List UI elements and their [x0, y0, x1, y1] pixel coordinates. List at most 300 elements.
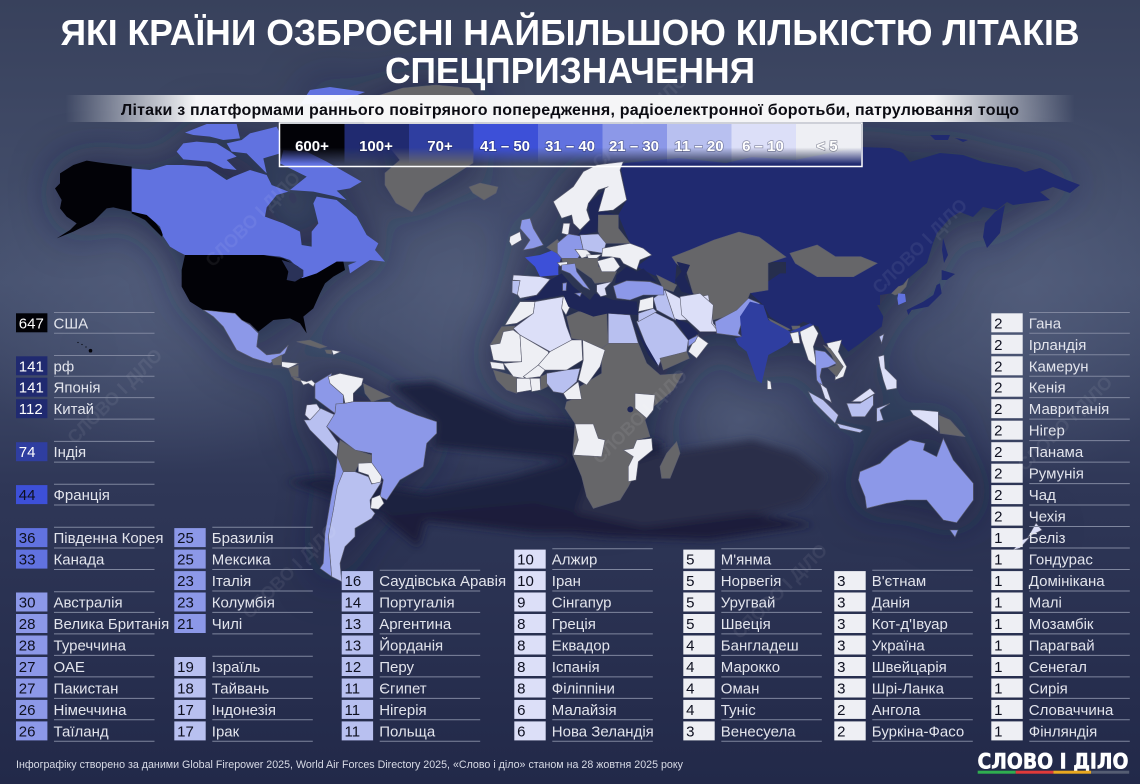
row: Туреччина: Туреччина	[54, 638, 127, 654]
Uruguay	[371, 495, 384, 509]
row: Мозамбік: Мозамбік	[1029, 616, 1094, 633]
row: Німеччина	[16, 700, 154, 720]
Benelux	[547, 239, 560, 253]
row: Венесуела: Венесуела	[721, 723, 796, 740]
legend labels	[295, 138, 838, 155]
row: Чад	[991, 485, 1130, 505]
Tasmania	[950, 530, 958, 537]
row: Марокко	[683, 657, 822, 677]
Malaysia	[820, 383, 832, 403]
row: Кенія	[991, 378, 1130, 398]
Togo and Benin	[541, 373, 548, 390]
Russia	[625, 135, 1080, 305]
row: Саудівська Аравія: 16	[345, 573, 361, 590]
South Korea	[897, 293, 906, 305]
row: Таїланд	[16, 721, 154, 741]
Morocco	[505, 302, 535, 325]
ranking column 4	[514, 549, 654, 741]
Red Sea and Persian Gulf	[627, 317, 698, 412]
row: Іспанія: 8	[517, 659, 525, 676]
world map	[55, 85, 1080, 582]
row: Південна Корея: Південна Корея	[54, 530, 163, 547]
West Africa	[493, 370, 517, 393]
row: Туреччина	[16, 636, 154, 655]
Mozambique	[623, 438, 653, 482]
row: Південна Корея: 36	[19, 530, 35, 547]
Iraq	[653, 290, 675, 320]
row: Індонезія: Індонезія	[212, 702, 276, 719]
row: Саудівська Аравія: Саудівська Аравія	[379, 573, 506, 590]
legend labels: 600+	[295, 138, 329, 155]
Slovakia	[587, 254, 602, 258]
row: Нігер: Нігер	[1029, 423, 1065, 440]
South and East Asia, Oceania	[680, 293, 973, 523]
row: Парагвай: Парагвай	[1029, 638, 1095, 654]
row: Аргентина	[342, 614, 480, 634]
row: Беліз	[991, 528, 1130, 548]
row: Беліз: 1	[994, 530, 1002, 547]
Ecuador	[305, 404, 321, 420]
row: Ізраїль: Ізраїль	[212, 659, 260, 676]
Kazakhstan and Central Asia	[672, 232, 786, 320]
row: Румунія: 2	[994, 466, 1002, 483]
row: Малі: Малі	[1029, 594, 1062, 612]
row: Швейцарія: Швейцарія	[872, 659, 947, 676]
Western Sahara	[490, 326, 515, 345]
row: Уругвай: Уругвай	[721, 594, 775, 612]
subtitle bar	[65, 95, 1075, 122]
row: Тайвань	[174, 678, 313, 698]
row: Ангола: Ангола	[872, 702, 921, 719]
row: Словаччина	[991, 700, 1130, 720]
row: Індія: 74	[19, 444, 35, 461]
Greenland	[364, 85, 476, 212]
row: Еквадор: 8	[517, 638, 525, 654]
row: Польща: Польща	[379, 723, 436, 740]
row: Туніс: 4	[686, 702, 694, 719]
Paraguay	[358, 463, 382, 485]
row: Сінгапур: 9	[517, 594, 525, 612]
Colombia	[315, 373, 343, 413]
row: Пакистан: Пакистан	[54, 680, 118, 698]
row: Норвегія: 5	[686, 573, 694, 590]
Canadian Arctic islands	[177, 124, 362, 200]
Denmark	[562, 223, 570, 235]
row: В'єтнам: 3	[837, 573, 845, 590]
Scandinavia and Finland	[553, 162, 627, 230]
Oman	[688, 335, 708, 358]
row: Чилі: Чилі	[212, 616, 242, 633]
row: Колумбія: Колумбія	[212, 594, 275, 612]
row: Алжир: 10	[517, 552, 534, 569]
row: Оман: Оман	[721, 680, 759, 698]
Laos and Cambodia	[823, 345, 843, 377]
row: Марокко: Марокко	[721, 659, 780, 676]
Saudi Arabia	[637, 312, 688, 367]
row: Чехія: Чехія	[1029, 509, 1066, 526]
row: Нова Зеландія: 6	[517, 723, 525, 740]
UAE	[688, 335, 698, 347]
source note: Інфографіку створено за даними Global Firepower 2025, World Air Forces Directory 2025, «Слово і діло» станом на 28 жовтня 2025 року	[16, 759, 684, 771]
USA	[182, 255, 345, 333]
France	[525, 251, 562, 277]
row: Кенія: 2	[994, 380, 1002, 397]
Pakistan	[715, 298, 760, 337]
row: Малі	[991, 592, 1130, 612]
row: Німеччина: Німеччина	[54, 702, 127, 719]
legend labels: 41 – 50	[480, 138, 530, 155]
row: Туніс: Туніс	[721, 702, 756, 719]
row: Україна: 3	[837, 638, 845, 654]
row: Шрі-Ланка: 3	[837, 680, 845, 698]
Taiwan	[879, 334, 884, 343]
Western New Guinea	[910, 410, 938, 432]
row: Ангола: 2	[837, 702, 845, 719]
row: Китай	[16, 399, 154, 419]
aircraft silhouette	[287, 382, 825, 547]
row: Буркіна-Фасо: 2	[837, 723, 845, 740]
title: ЯКІ КРАЇНИ ОЗБРОЄНІ НАЙБІЛЬШОЮ КІЛЬКІСТЮ ЛІТАКІВ	[60, 11, 1080, 53]
Egypt	[608, 313, 638, 343]
row: Пакистан: 27	[19, 680, 35, 698]
legend labels: < 5	[816, 138, 838, 155]
ranking column 7	[991, 312, 1130, 741]
row: Буркіна-Фасо	[834, 721, 973, 741]
Central America	[272, 355, 302, 382]
row: Японія: Японія	[54, 380, 101, 397]
legend labels: 100+	[359, 138, 393, 155]
row: Мозамбік: 1	[994, 616, 1002, 633]
row: Марокко: 4	[686, 659, 694, 676]
row: Польща: 11	[345, 723, 360, 740]
row: Йорданія: Йорданія	[379, 636, 443, 654]
row: Фінляндія: 1	[994, 723, 1002, 740]
row: Фінляндія: Фінляндія	[1029, 723, 1097, 740]
row: Японія	[16, 378, 154, 398]
row: Японія: 141	[19, 380, 44, 397]
Caspian Sea	[675, 262, 693, 295]
North Korea	[892, 278, 908, 295]
row: Норвегія: Норвегія	[721, 573, 781, 590]
Baltics and Belarus	[598, 215, 630, 243]
row: Єгипет	[342, 678, 480, 698]
Brazil	[327, 402, 437, 500]
row: Сінгапур: Сінгапур	[552, 594, 612, 612]
row: Португалія	[342, 592, 480, 612]
legend labels: 21 – 30	[609, 138, 659, 155]
Caribbean	[297, 340, 341, 355]
row: Сенегал: 1	[994, 659, 1002, 676]
row: Домінікана: Домінікана	[1029, 573, 1105, 590]
row: Португалія: 14	[345, 594, 361, 612]
Nigeria	[547, 368, 580, 393]
Burkina Faso	[523, 365, 545, 378]
Bolivia	[337, 440, 372, 472]
Ivory Coast	[517, 378, 532, 393]
Canada	[132, 165, 385, 278]
row: Гондурас: 1	[994, 552, 1002, 569]
watermarks: СЛОВО І ДІЛО	[202, 168, 304, 271]
row: Словаччина: Словаччина	[1029, 702, 1114, 719]
row: Нігер: 2	[994, 423, 1002, 440]
row: Мексика: Мексика	[212, 552, 271, 569]
watermarks: СЛОВО І ДІЛО	[589, 70, 691, 173]
row: Ізраїль	[174, 656, 313, 677]
Madagascar	[660, 442, 680, 478]
row: Фінляндія	[991, 721, 1130, 741]
Cameroon	[563, 382, 582, 399]
row: Індонезія	[174, 700, 313, 720]
ranking column 6	[834, 570, 973, 741]
legend labels: 70+	[427, 138, 453, 155]
row: Сирія	[991, 678, 1130, 698]
row: Велика Британія: 28	[19, 616, 35, 633]
Libya	[567, 312, 608, 348]
Turkey	[613, 281, 664, 300]
China	[751, 273, 883, 352]
Peru	[304, 408, 338, 457]
row: Колумбія	[174, 592, 313, 612]
Argentina	[328, 472, 382, 582]
row: М'янма	[683, 549, 822, 570]
row: Україна	[834, 636, 973, 655]
watermarks	[64, 70, 1116, 643]
row: Канада: Канада	[54, 552, 105, 569]
United Kingdom	[520, 218, 543, 250]
Europe	[509, 162, 693, 317]
row: Сінгапур	[514, 592, 653, 612]
row: Перу: Перу	[379, 659, 414, 676]
row: Алжир	[514, 549, 653, 570]
Mauritania	[490, 330, 522, 362]
row: Румунія: Румунія	[1029, 466, 1084, 483]
row: Бразилія	[174, 527, 313, 548]
South America and Africa	[300, 290, 720, 582]
row: Україна: Україна	[872, 638, 925, 654]
row: Філіппіни	[514, 678, 653, 698]
row: Венесуела	[683, 721, 822, 741]
row: Іран: 10	[517, 573, 534, 590]
row: Тайвань: Тайвань	[212, 680, 269, 698]
New Zealand	[1013, 523, 1042, 550]
row: США: США	[54, 315, 88, 332]
row: Індія: Індія	[54, 444, 86, 461]
row: Малайзія: Малайзія	[552, 702, 617, 719]
watermarks: СЛОВО І ДІЛО	[1014, 372, 1116, 475]
row: Бразилія: 25	[177, 530, 194, 547]
row: Ірландія: Ірландія	[1029, 337, 1086, 354]
row: Оман	[683, 678, 822, 698]
row: Велика Британія: Велика Британія	[54, 616, 169, 633]
row: Австралія: Австралія	[54, 594, 123, 612]
row: Швеція	[683, 614, 822, 634]
row: Кенія: Кенія	[1029, 380, 1066, 397]
ranking column 1	[16, 312, 169, 741]
row: Чад: Чад	[1029, 487, 1056, 504]
row: В'єтнам: В'єтнам	[872, 573, 926, 590]
row: Мексика: 25	[177, 552, 194, 569]
row: Туреччина: 28	[19, 638, 35, 654]
Jordan	[638, 308, 657, 322]
Chile	[320, 457, 343, 577]
row: Домінікана: 1	[994, 573, 1002, 590]
row: рф	[16, 356, 154, 376]
Panama	[300, 380, 315, 387]
row: Пакистан	[16, 678, 154, 698]
Czechia	[575, 249, 592, 258]
Ireland	[509, 232, 522, 246]
row: Саудівська Аравія	[342, 570, 506, 591]
Bangladesh	[790, 332, 800, 343]
Iran	[665, 290, 720, 332]
Iceland	[469, 183, 498, 200]
row: Гана: Гана	[1029, 315, 1062, 332]
Korea and Japan	[892, 270, 955, 315]
row: Сенегал: Сенегал	[1029, 659, 1087, 676]
row: Аргентина: 13	[345, 616, 361, 633]
Venezuela	[328, 373, 363, 403]
row: Панама: Панама	[1029, 444, 1084, 461]
row: Малайзія	[514, 700, 653, 720]
row: Венесуела: 3	[686, 723, 694, 740]
row: Гана: 2	[994, 315, 1002, 332]
row: Данія: Данія	[872, 594, 910, 612]
row: Сирія: Сирія	[1029, 680, 1068, 698]
row: Філіппіни: 8	[517, 680, 525, 698]
Hawaii	[77, 342, 92, 353]
row: Нова Зеландія: Нова Зеландія	[552, 723, 654, 740]
watermarks: СЛОВО І ДІЛО	[239, 520, 341, 623]
row: Уругвай	[683, 592, 822, 612]
row: Бангладеш: 4	[686, 638, 694, 654]
row: Оман: 4	[686, 680, 694, 698]
row: Ізраїль: 19	[177, 659, 194, 676]
Chad	[578, 340, 605, 385]
Angola	[573, 424, 605, 457]
row: Ангола	[834, 700, 973, 720]
Caucasus	[657, 275, 677, 292]
Myanmar	[800, 325, 818, 367]
subtitle bar: Літаки з платформами раннього повітряного попередження, радіоелектронної боротьби, патрулювання тощо	[121, 102, 1019, 119]
Alaska panhandle	[132, 210, 163, 237]
Algeria	[513, 297, 572, 352]
row: Чилі: 21	[177, 616, 194, 633]
row: Австралія	[16, 592, 154, 612]
row: Кот-д'Івуар	[834, 614, 973, 634]
row: Данія	[834, 592, 973, 612]
title: СПЕЦПРИЗНАЧЕННЯ	[385, 50, 755, 91]
row: ОАЕ	[16, 657, 154, 677]
Ghana	[530, 378, 541, 392]
Australia	[858, 438, 973, 523]
Thailand	[815, 350, 837, 392]
row: Ірак: Ірак	[212, 723, 240, 740]
Kenya	[635, 393, 655, 418]
Ellesmere	[300, 87, 365, 105]
row: Словаччина: 1	[994, 702, 1002, 719]
Mongolia	[790, 245, 877, 277]
row: Парагвай	[991, 636, 1130, 655]
row: Нігерія: 11	[345, 702, 360, 719]
row: Греція: Греція	[552, 616, 596, 633]
row: Колумбія: 23	[177, 594, 194, 612]
row: США	[16, 312, 154, 333]
row: Канада	[16, 550, 154, 570]
row: Перу	[342, 657, 480, 677]
legend	[280, 123, 862, 166]
Indonesia	[808, 392, 890, 433]
row: Румунія	[991, 464, 1130, 484]
legend frame	[280, 123, 862, 166]
row: Південна Корея	[16, 527, 163, 548]
Tunisia	[562, 297, 570, 315]
Alaska	[55, 161, 132, 238]
row: Йорданія: 13	[345, 638, 361, 654]
row: Індонезія: 17	[177, 702, 194, 719]
Mali	[503, 335, 550, 378]
Russia west	[618, 163, 760, 283]
Ukraine	[602, 243, 652, 270]
row: Франція	[16, 484, 154, 505]
row: рф: 141	[19, 358, 44, 375]
row: Нова Зеландія	[514, 721, 654, 741]
row: Ірак: 17	[177, 723, 194, 740]
Black Sea	[615, 267, 657, 283]
Greece	[597, 282, 612, 297]
row: Польща	[342, 721, 480, 741]
row: Чад: 2	[994, 487, 1002, 504]
legend swatches	[280, 124, 861, 166]
row: Еквадор	[514, 636, 653, 655]
row: Нігерія	[342, 700, 480, 720]
row: Китай: Китай	[54, 401, 94, 418]
ranking column 2	[174, 527, 313, 741]
title	[60, 11, 1080, 91]
Mexico	[203, 310, 288, 363]
row: Єгипет: 11	[345, 680, 360, 698]
row: США: 647	[19, 315, 44, 332]
Baltic Sea	[577, 187, 617, 237]
row: Данія: 3	[837, 594, 845, 612]
row: Таїланд: Таїланд	[54, 723, 109, 740]
row: Іран	[514, 571, 653, 591]
row: Гана	[991, 312, 1130, 333]
row: Гондурас: Гондурас	[1029, 552, 1093, 569]
Switzerland	[557, 262, 567, 266]
row: Камерун: Камерун	[1029, 358, 1089, 375]
row: Буркіна-Фасо: Буркіна-Фасо	[872, 723, 964, 740]
row: М'янма: 5	[686, 552, 694, 569]
row: Уругвай: 5	[686, 594, 694, 612]
Italy	[562, 263, 590, 297]
ranking column 3	[342, 570, 506, 741]
Spain	[513, 275, 550, 298]
row: Перу: 12	[345, 659, 361, 676]
row: Китай: 112	[19, 401, 43, 418]
row: Парагвай: 1	[994, 638, 1002, 654]
row: Греція: 8	[517, 616, 525, 633]
row: Швеція: Швеція	[721, 616, 771, 633]
Romania	[597, 257, 620, 272]
row: Тайвань: 18	[177, 680, 194, 698]
Portugal	[512, 281, 520, 295]
Balkans and central Europe	[562, 258, 617, 283]
legend labels: 11 – 20	[674, 138, 724, 155]
row: Аргентина: Аргентина	[379, 616, 452, 633]
row: Еквадор: Еквадор	[552, 638, 610, 654]
row: Німеччина: 26	[19, 702, 35, 719]
row: Нігер	[991, 421, 1130, 441]
